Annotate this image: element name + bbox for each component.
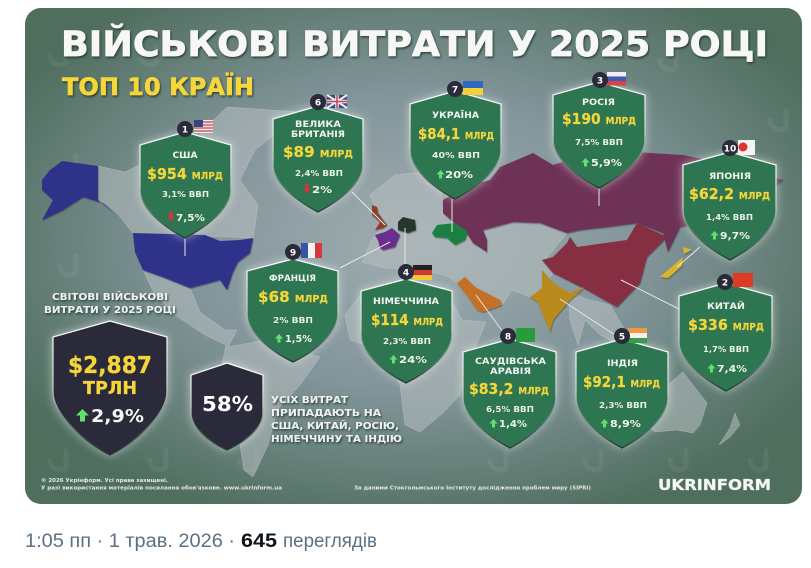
panel: USA: 3,1% ВВП [162, 190, 209, 199]
panel: USA: $954 МЛРД [147, 165, 223, 183]
source note: За даними Стокгольмського Інституту дослідження проблем миру (SIPRI) [354, 484, 591, 492]
panel: United Kingdom: $89 МЛРД [283, 143, 353, 161]
panel: Germany: НІМЕЧЧИНА [373, 297, 439, 307]
panel: Russia: $190 МЛРД [562, 110, 636, 128]
panel: India: 2,3% ВВП [599, 401, 647, 410]
country: China [542, 223, 667, 307]
panel: United Kingdom: БРИТАНІЯ [291, 130, 345, 140]
country: Russia [443, 150, 783, 252]
panel: United Kingdom: ВЕЛИКА [295, 120, 341, 130]
panel: Japan: $62,2 МЛРД [689, 185, 770, 203]
panel: Saudi Arabia: $83,2 МЛРД [469, 380, 549, 398]
country: France [375, 228, 400, 250]
badge: 7: 7 [452, 86, 458, 96]
panel: Germany: 24% [399, 355, 427, 366]
panel: Saudi Arabia: 1,4% [499, 419, 527, 430]
country: Germany [398, 217, 416, 233]
panel: United Kingdom: 2,4% ВВП [295, 169, 343, 178]
flag: India [628, 328, 647, 343]
copyright: У разі використання матеріалів посилання обов'язкове. www.ukrinform.ua [41, 484, 282, 492]
panel: Japan: ЯПОНІЯ [709, 172, 751, 182]
country: Alaska (USA) [42, 161, 120, 220]
panel: Russia [553, 72, 645, 188]
panel: India: 8,9% [610, 419, 641, 430]
panel: Germany [361, 264, 452, 383]
flag: Saudi Arabia [516, 328, 535, 342]
title: ВІЙСЬКОВІ ВИТРАТИ У 2025 РОЦІ [61, 23, 768, 65]
panel: USA: США [172, 151, 198, 161]
text: 58 percent description: УСІХ ВИТРАТ [271, 395, 348, 406]
heading: global spending: ВИТРАТИ У 2025 РОЦІ [44, 305, 176, 316]
panel: global total shield: ТРЛН [83, 378, 137, 399]
connector lines [185, 188, 700, 335]
panel: 58 percent shield [191, 363, 263, 450]
panel: Russia: 7,5% ВВП [575, 138, 623, 147]
panel: United Kingdom: 2% [312, 185, 332, 196]
panel: France [247, 243, 338, 362]
panel: USA: 7,5% [176, 213, 205, 224]
country: India [530, 270, 585, 332]
text: 58 percent description: США, КИТАЙ, РОСІЮ, [271, 419, 399, 432]
panel: China: КИТАЙ [707, 300, 745, 312]
panel: France: 1,5% [285, 334, 312, 345]
panel: Japan [683, 140, 776, 260]
panel: Russia: 5,9% [591, 158, 622, 169]
panel: India: ІНДІЯ [607, 359, 638, 369]
panel: global total shield [53, 321, 167, 455]
post timestamp: 645 [241, 531, 277, 552]
country: Ukraine [432, 223, 468, 245]
text: 58 percent description: ПРИПАДАЮТЬ НА [271, 408, 381, 419]
flag: UK [327, 95, 347, 108]
badge: 10: 10 [724, 144, 736, 154]
panel: Ukraine: $84,1 МЛРД [418, 125, 494, 143]
panel: Ukraine: УКРАЇНА [432, 110, 479, 121]
panel: China: $336 МЛРД [688, 316, 764, 334]
panel: Ukraine [410, 81, 501, 199]
panel: France: ФРАНЦІЯ [269, 274, 316, 284]
heading: global spending [44, 290, 176, 316]
copyright [41, 477, 282, 492]
badge: 8: 8 [505, 332, 511, 342]
flag: Ukraine [463, 81, 483, 95]
post timestamp: 1:05 пп · 1 трав. 2026 · [25, 531, 235, 552]
panel: China: 7,4% [717, 364, 747, 375]
panel: China: 1,7% ВВП [703, 345, 749, 354]
country: Saudi Arabia [457, 277, 502, 312]
panel: France: $68 МЛРД [258, 288, 328, 306]
badge: 9: 9 [290, 248, 296, 258]
land: other countries [98, 107, 740, 477]
badge: 2: 2 [722, 278, 728, 288]
panel: India: $92,1 МЛРД [583, 373, 660, 391]
badge: 1: 1 [182, 126, 188, 136]
panel: Japan: 9,7% [720, 231, 750, 242]
panel: Russia: РОСІЯ [582, 98, 615, 108]
badge: 4: 4 [403, 268, 409, 278]
badge: 6: 6 [315, 98, 321, 108]
logo: UKRINFORM [658, 476, 771, 494]
panel: Ukraine: 20% [445, 170, 473, 181]
flag: Russia [607, 72, 626, 86]
post timestamp [25, 531, 377, 552]
panel: Saudi Arabia [463, 328, 556, 448]
panel: Germany: 2,3% ВВП [383, 337, 431, 346]
panel: Saudi Arabia: АРАВІЯ [490, 367, 531, 377]
world map [42, 107, 783, 477]
panel: global total shield: 2,9% [91, 406, 144, 427]
icon: up arrow [76, 409, 89, 422]
flag: Germany [413, 265, 432, 280]
panel: Saudi Arabia: САУДІВСЬКА [475, 357, 546, 367]
post timestamp: переглядів [283, 531, 377, 552]
panel: Saudi Arabia: 6,5% ВВП [486, 405, 534, 414]
panel: India [576, 328, 668, 448]
flag: Japan [738, 140, 755, 155]
panel: Japan: 1,4% ВВП [706, 213, 753, 222]
flag: France [301, 243, 322, 258]
text: 58 percent description [271, 395, 402, 445]
flag: China [733, 273, 753, 287]
heading: global spending: СВІТОВІ ВІЙСЬКОВІ [52, 290, 168, 303]
text: 58 percent description: НІМЕЧЧИНУ ТА ІНДІЮ [271, 434, 402, 445]
copyright: © 2026 Укрінформ. Усі права захищені. [41, 477, 168, 484]
panel: United Kingdom [273, 94, 363, 212]
panel: USA [140, 120, 231, 238]
panel: France: 2% ВВП [273, 316, 313, 325]
panel: Germany: $114 МЛРД [371, 311, 443, 329]
panel: China [679, 273, 772, 391]
country: USA [133, 233, 253, 290]
subtitle: ТОП 10 КРАЇН [62, 72, 254, 101]
panel: Ukraine: 40% ВВП [432, 151, 480, 160]
badge: 5: 5 [619, 332, 625, 342]
panel: global total shield: $2,887 [68, 353, 152, 379]
country: Japan [660, 247, 692, 278]
flag: USA [194, 120, 213, 133]
panel: 58 percent shield: 58% [202, 392, 253, 416]
badge: 3: 3 [597, 76, 603, 86]
country: United Kingdom [372, 205, 387, 230]
